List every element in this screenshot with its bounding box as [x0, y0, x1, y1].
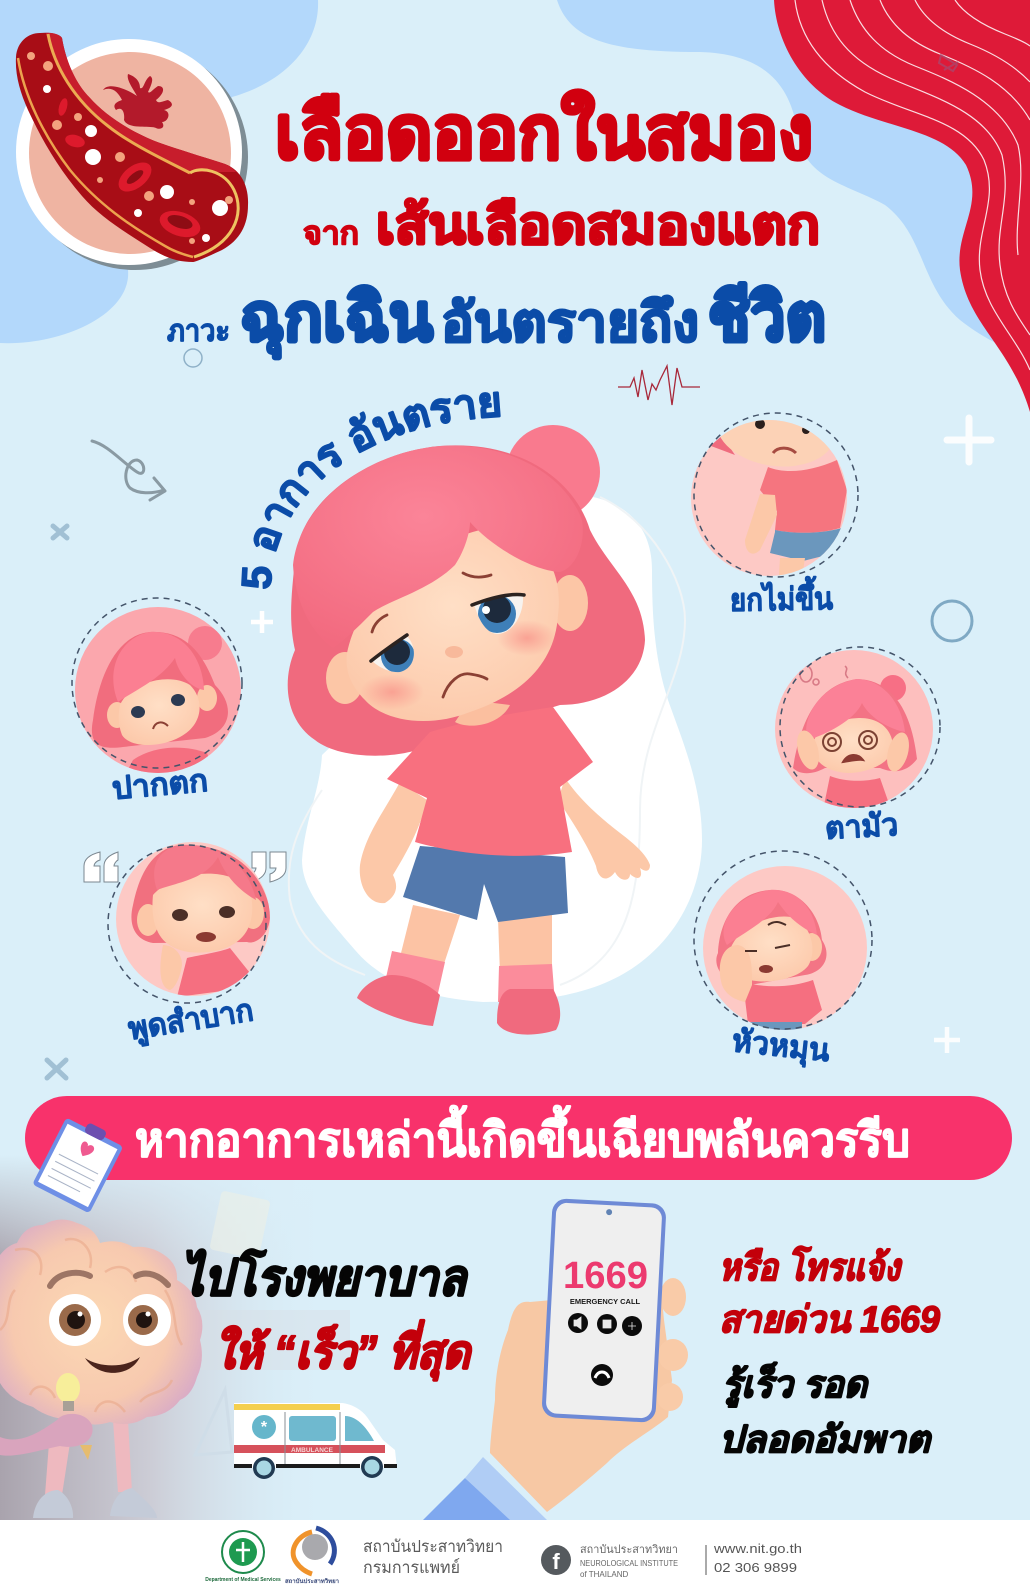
text: or call hotline	[719, 1245, 940, 1340]
girl: back hair	[288, 445, 645, 756]
symptom: blurred vision	[775, 647, 940, 815]
title: line 3: อันตรายถึง	[441, 293, 699, 353]
icon: facebook: f	[552, 1549, 560, 1574]
girl: shoes	[357, 975, 560, 1035]
background blob: top left	[0, 0, 318, 343]
decoration: quote marks	[84, 852, 286, 882]
footer text: facebook page	[580, 1544, 678, 1579]
girl: fringe	[293, 446, 583, 648]
girl: shirt	[387, 707, 593, 856]
phone buttons	[568, 1313, 642, 1386]
title: line 2: จาก	[303, 215, 359, 251]
brain: brows	[50, 1273, 168, 1286]
brain: shoes	[33, 1488, 157, 1518]
phone number: 1669	[563, 1255, 648, 1297]
brain: left eye	[49, 1294, 101, 1346]
icon: ambulance	[234, 1403, 397, 1479]
label: blurred vision: ตามัว	[824, 807, 899, 846]
footer text: website and phone	[713, 1541, 802, 1575]
white blob behind girl	[289, 497, 702, 1002]
emergency call text: EMERGENCY CALL	[570, 1297, 641, 1306]
logo: neurological institute: สถาบันประสาทวิทยา	[285, 1577, 339, 1585]
symptom: drooping mouth	[72, 598, 242, 775]
girl: brows and mouth	[372, 573, 491, 697]
brain: pencil	[80, 1445, 92, 1460]
shirt sleeve	[423, 1478, 512, 1520]
girl: nose	[445, 646, 463, 658]
phone	[541, 1198, 667, 1423]
title: line 1: เลือดออกในสมอง	[275, 89, 813, 174]
label: arm weakness: ยกไม่ขึ้น	[730, 575, 833, 618]
brain: light bulb	[56, 1373, 80, 1411]
icon: ambulance: AMBULANCE	[291, 1447, 334, 1454]
shirt cuff	[465, 1457, 547, 1520]
girl: shorts	[403, 846, 568, 922]
text: or call hotline: หรือ โทรแจ้ง	[719, 1245, 903, 1288]
icon: facebook	[541, 1545, 571, 1575]
footer text: website and phone: 02 306 9899	[714, 1560, 797, 1575]
decoration: circles and plus marks	[47, 349, 991, 1078]
girl: socks	[385, 951, 555, 1002]
hand: fingers	[657, 1278, 688, 1411]
red wave corner	[774, 0, 1030, 412]
label: drooping mouth: ปากตก	[111, 763, 209, 806]
title: line 3: ฉุกเฉิน	[240, 280, 433, 359]
girl: hair bun	[506, 425, 600, 519]
text: know fast survive	[719, 1362, 932, 1460]
brain backdrop photo	[0, 1155, 350, 1520]
logo: department of medical services: Department of Medical Services	[205, 1577, 281, 1583]
brain: arm and hand	[0, 1414, 93, 1456]
girl: right eye	[472, 595, 524, 634]
banner	[25, 1096, 1012, 1180]
text: or call hotline: สายด่วน 1669	[719, 1299, 940, 1340]
title: line 3: ชีวิต	[708, 280, 826, 354]
girl: neck	[455, 700, 510, 726]
girl: right cheek	[497, 620, 557, 656]
icon: pulse line	[618, 366, 700, 405]
illustration: hand holding phone	[423, 1198, 688, 1520]
footer text: institute name	[363, 1537, 503, 1577]
title: line 3	[167, 280, 826, 359]
text: as fast as possible: ให้ “เร็ว” ที่สุด	[214, 1319, 473, 1381]
footer text: facebook page: of THAILAND	[580, 1570, 629, 1579]
background blob: top right	[557, 0, 1030, 358]
brain: right eye	[123, 1294, 171, 1346]
symptom: slurred speech	[108, 842, 270, 1003]
footer text: institute name: กรมการแพทย์	[363, 1558, 460, 1577]
symptom: dizziness	[694, 851, 872, 1032]
brain: folds	[0, 1239, 182, 1412]
icon: ambulance: *	[261, 1419, 268, 1436]
banner: หากอาการเหล่านี้เกิดขึ้นเฉียบพลันควรรีบ	[135, 1105, 910, 1166]
brain: mouth	[85, 1357, 140, 1373]
footer text: facebook page: NEUROLOGICAL INSTITUTE	[580, 1559, 678, 1568]
brain: legs	[45, 1420, 132, 1495]
girl: right ear	[552, 575, 588, 631]
girl: left cheek	[360, 674, 424, 710]
text: go to hospital: ไปโรงพยาบาล	[181, 1248, 468, 1306]
icon: clipboard	[32, 1112, 126, 1213]
footer text: institute name: สถาบันประสาทวิทยา	[363, 1537, 503, 1556]
icon: burst blood vessel	[16, 33, 248, 270]
label: dizziness: หัวหมุน	[730, 1023, 832, 1070]
label: slurred speech: พูดสำบาก	[126, 992, 256, 1049]
brain: body	[0, 1219, 202, 1425]
girl: left eye	[371, 635, 415, 673]
footer	[0, 1520, 1030, 1590]
footer text: facebook page: สถาบันประสาทวิทยา	[580, 1544, 678, 1556]
heading: 5 symptoms arc: 5 อาการ อันตราย	[241, 391, 501, 589]
girl: left arm	[360, 782, 427, 903]
text: know fast survive: รู้เร็ว รอด	[722, 1362, 869, 1408]
symptom: arm weakness	[691, 412, 859, 578]
logo: neurological institute	[285, 1528, 339, 1585]
title: line 3: ภาวะ	[167, 315, 230, 348]
title: line 2: เส้นเลือดสมองแตก	[376, 197, 820, 255]
girl: legs	[398, 905, 552, 975]
illustration: main girl	[288, 425, 650, 1035]
icon: curly arrow	[92, 441, 165, 500]
illustration: brain mascot	[0, 1219, 202, 1518]
logo: department of medical services	[205, 1531, 281, 1583]
girl: face	[347, 530, 559, 721]
girl: left ear	[326, 652, 364, 704]
girl: right arm	[558, 778, 650, 880]
text: know fast survive: ปลอดอัมพาต	[719, 1419, 932, 1460]
footer text: website and phone: www.nit.go.th	[713, 1541, 802, 1556]
hand	[490, 1280, 672, 1512]
